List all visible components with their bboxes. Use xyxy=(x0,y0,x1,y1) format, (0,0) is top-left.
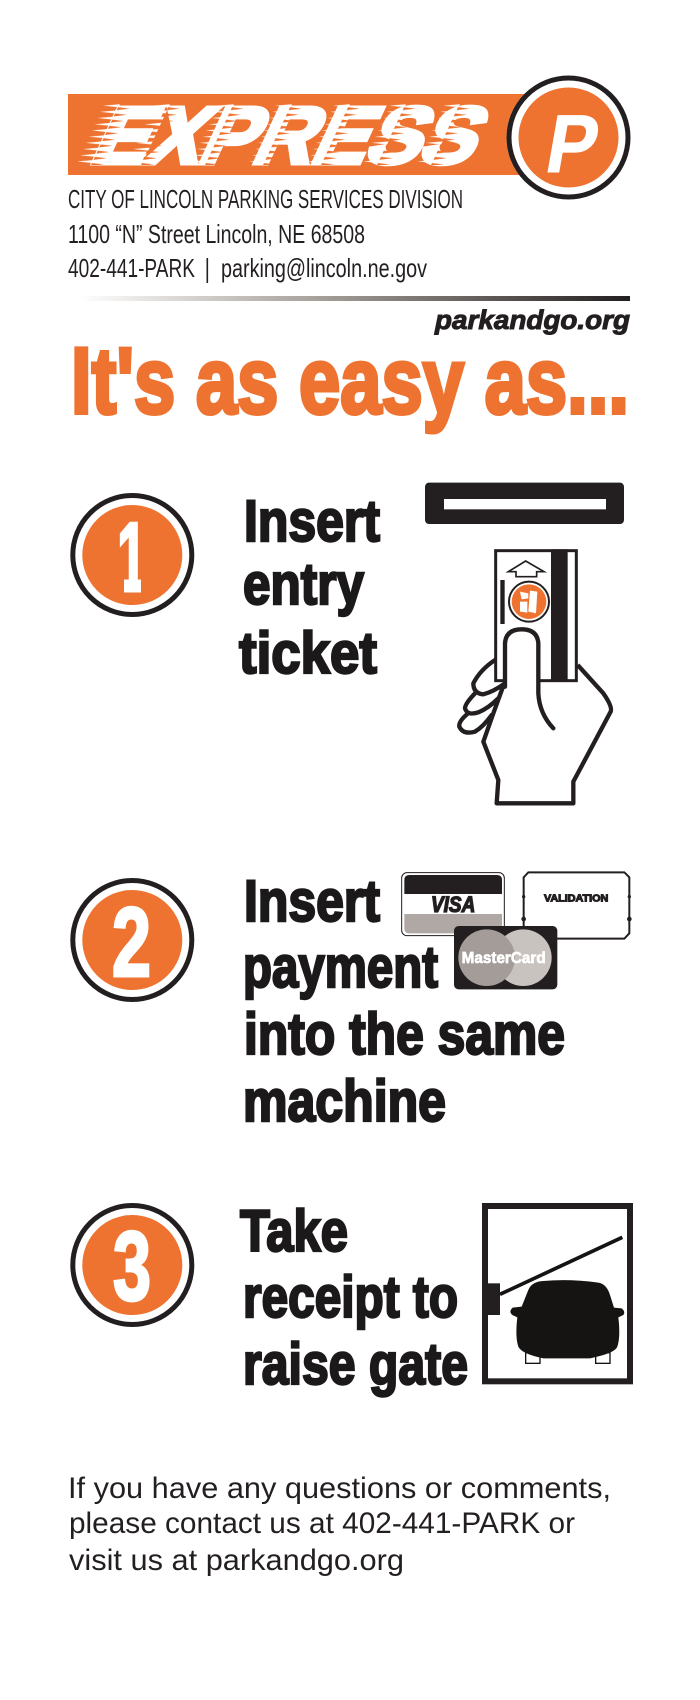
Visa card: VISA xyxy=(431,892,475,917)
icon: ticket slot and hand xyxy=(425,483,624,803)
step 3 text: Take xyxy=(240,1199,348,1264)
hand index finger xyxy=(505,629,553,728)
ticket slot xyxy=(425,483,624,524)
website: parkandgo.org xyxy=(434,305,631,335)
hand outer fingers xyxy=(459,660,504,733)
step 1 text: Insert xyxy=(244,489,380,554)
MasterCard card xyxy=(454,926,557,989)
step 1 text: entry xyxy=(243,552,364,617)
step 1 badge xyxy=(73,496,192,614)
hand palm xyxy=(483,665,611,803)
step 3 badge xyxy=(73,1206,192,1324)
step 2 text: machine xyxy=(243,1069,446,1134)
icon: payment cards xyxy=(402,872,632,989)
contact details xyxy=(68,184,463,283)
step 2 text: Insert xyxy=(244,869,380,934)
validation card: VALIDATION xyxy=(544,894,608,905)
logo P badge xyxy=(506,76,630,200)
logo banner xyxy=(68,94,530,175)
contact details: 402-441-PARK xyxy=(68,253,195,283)
validation card xyxy=(521,872,632,939)
step 1 text xyxy=(239,489,380,686)
footer note xyxy=(68,1472,611,1577)
footer note: If you have any questions or comments, xyxy=(68,1472,611,1505)
step 3 text: raise gate xyxy=(243,1332,468,1397)
Visa card xyxy=(402,873,504,936)
step 1 text: ticket xyxy=(239,621,377,686)
icon: car at raised gate xyxy=(485,1206,630,1381)
step 2 text xyxy=(243,869,565,1134)
logo P badge: P xyxy=(540,98,606,190)
contact details: 1100 “N” Street Lincoln, NE 68508 xyxy=(68,219,365,249)
MasterCard card: MasterCard xyxy=(462,950,546,967)
logo wordmark: EXPRESS xyxy=(80,91,504,180)
step 2 badge: 2 xyxy=(112,887,151,997)
contact details: CITY OF LINCOLN PARKING SERVICES DIVISION xyxy=(68,184,463,214)
logo: Express P xyxy=(68,76,630,200)
step 2 badge xyxy=(73,880,192,1000)
step 3 badge: 3 xyxy=(113,1211,151,1321)
step 2 text: payment xyxy=(243,935,438,1000)
step 1 badge: 1 xyxy=(117,502,147,612)
step 2 text: into the same xyxy=(244,1002,565,1067)
footer note: please contact us at 402-441-PARK or xyxy=(69,1507,575,1540)
entry ticket xyxy=(496,549,576,682)
contact details: parking@lincoln.ne.gov xyxy=(221,253,427,283)
step 3 text xyxy=(240,1199,468,1397)
footer note: visit us at parkandgo.org xyxy=(69,1544,404,1577)
step 3 text: receipt to xyxy=(243,1265,458,1330)
